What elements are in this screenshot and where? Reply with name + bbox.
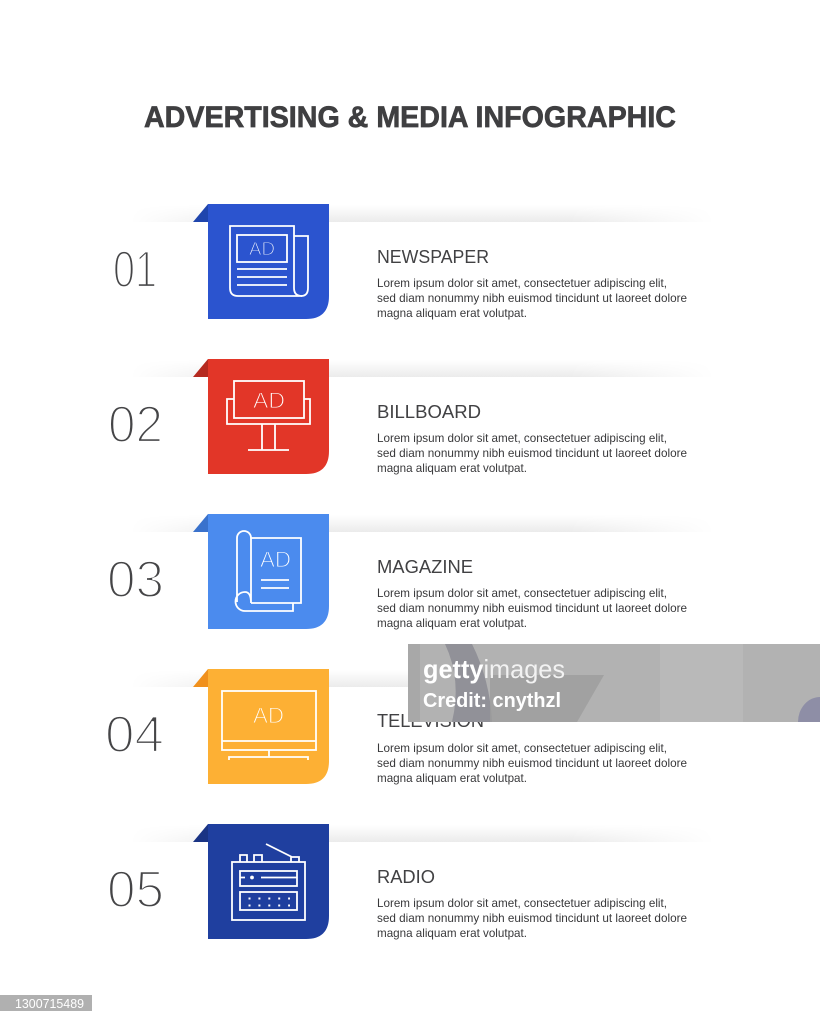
panel: 04 television bbox=[105, 669, 715, 785]
text block: billboard bbox=[377, 431, 687, 475]
panel: 05 radio bbox=[107, 824, 715, 940]
icon: billboard: AD bbox=[253, 388, 285, 413]
card: billboard bbox=[193, 359, 329, 474]
text block: billboard: sed diam nonummy nibh euismod tincidunt ut laoreet dolore bbox=[377, 446, 687, 460]
number 04: 04 bbox=[105, 706, 164, 764]
watermark banner bbox=[408, 644, 820, 722]
text block: newspaper: sed diam nonummy nibh euismod tincidunt ut laoreet dolore bbox=[377, 291, 687, 305]
icon: newspaper: AD bbox=[249, 239, 275, 259]
panel: 03 magazine bbox=[107, 514, 715, 630]
card: television bbox=[193, 669, 329, 784]
text block: newspaper bbox=[377, 276, 687, 320]
title: ADVERTISING & MEDIA INFOGRAPHIC bbox=[144, 101, 676, 134]
text block: television bbox=[377, 741, 687, 785]
heading: radio: RADIO bbox=[377, 867, 435, 887]
panel: 01 newspaper bbox=[113, 204, 715, 320]
card: magazine bbox=[193, 514, 329, 629]
text block: magazine bbox=[377, 586, 687, 630]
icon: radio bbox=[232, 844, 305, 920]
image id tag: 1300715489 bbox=[15, 996, 84, 1011]
text block: television: sed diam nonummy nibh euismod tincidunt ut laoreet dolore bbox=[377, 756, 687, 770]
text block: television: Lorem ipsum dolor sit amet, consectetuer adipiscing elit, bbox=[377, 741, 667, 755]
number 03: 03 bbox=[107, 551, 164, 609]
number 05: 05 bbox=[107, 861, 164, 919]
text block: magazine: Lorem ipsum dolor sit amet, consectetuer adipiscing elit, bbox=[377, 586, 667, 600]
icon: television: AD bbox=[253, 703, 284, 728]
text block: radio: magna aliquam erat volutpat. bbox=[377, 926, 527, 940]
watermark credit: Credit: cnythzl bbox=[423, 690, 561, 712]
card: radio bbox=[193, 824, 329, 939]
text block: radio: Lorem ipsum dolor sit amet, consectetuer adipiscing elit, bbox=[377, 896, 667, 910]
text block: billboard: magna aliquam erat volutpat. bbox=[377, 461, 527, 475]
heading: billboard: BILLBOARD bbox=[377, 402, 481, 422]
text block: newspaper: Lorem ipsum dolor sit amet, consectetuer adipiscing elit, bbox=[377, 276, 667, 290]
text block: magazine: magna aliquam erat volutpat. bbox=[377, 616, 527, 630]
number 02: 02 bbox=[108, 396, 163, 454]
text block: radio bbox=[377, 896, 687, 940]
text block: radio: sed diam nonummy nibh euismod tincidunt ut laoreet dolore bbox=[377, 911, 687, 925]
card: newspaper bbox=[193, 204, 329, 319]
panel: 02 billboard bbox=[108, 359, 715, 475]
text block: magazine: sed diam nonummy nibh euismod tincidunt ut laoreet dolore bbox=[377, 601, 687, 615]
heading: television: TELEVISION bbox=[377, 711, 484, 731]
text block: billboard: Lorem ipsum dolor sit amet, consectetuer adipiscing elit, bbox=[377, 431, 667, 445]
text block: television: magna aliquam erat volutpat. bbox=[377, 771, 527, 785]
heading: magazine: MAGAZINE bbox=[377, 557, 473, 577]
heading: newspaper: NEWSPAPER bbox=[377, 247, 489, 267]
icon: magazine: AD bbox=[260, 547, 291, 572]
number 01: 01 bbox=[113, 241, 157, 299]
text block: newspaper: magna aliquam erat volutpat. bbox=[377, 306, 527, 320]
watermark logo: gettyimages bbox=[423, 654, 565, 684]
